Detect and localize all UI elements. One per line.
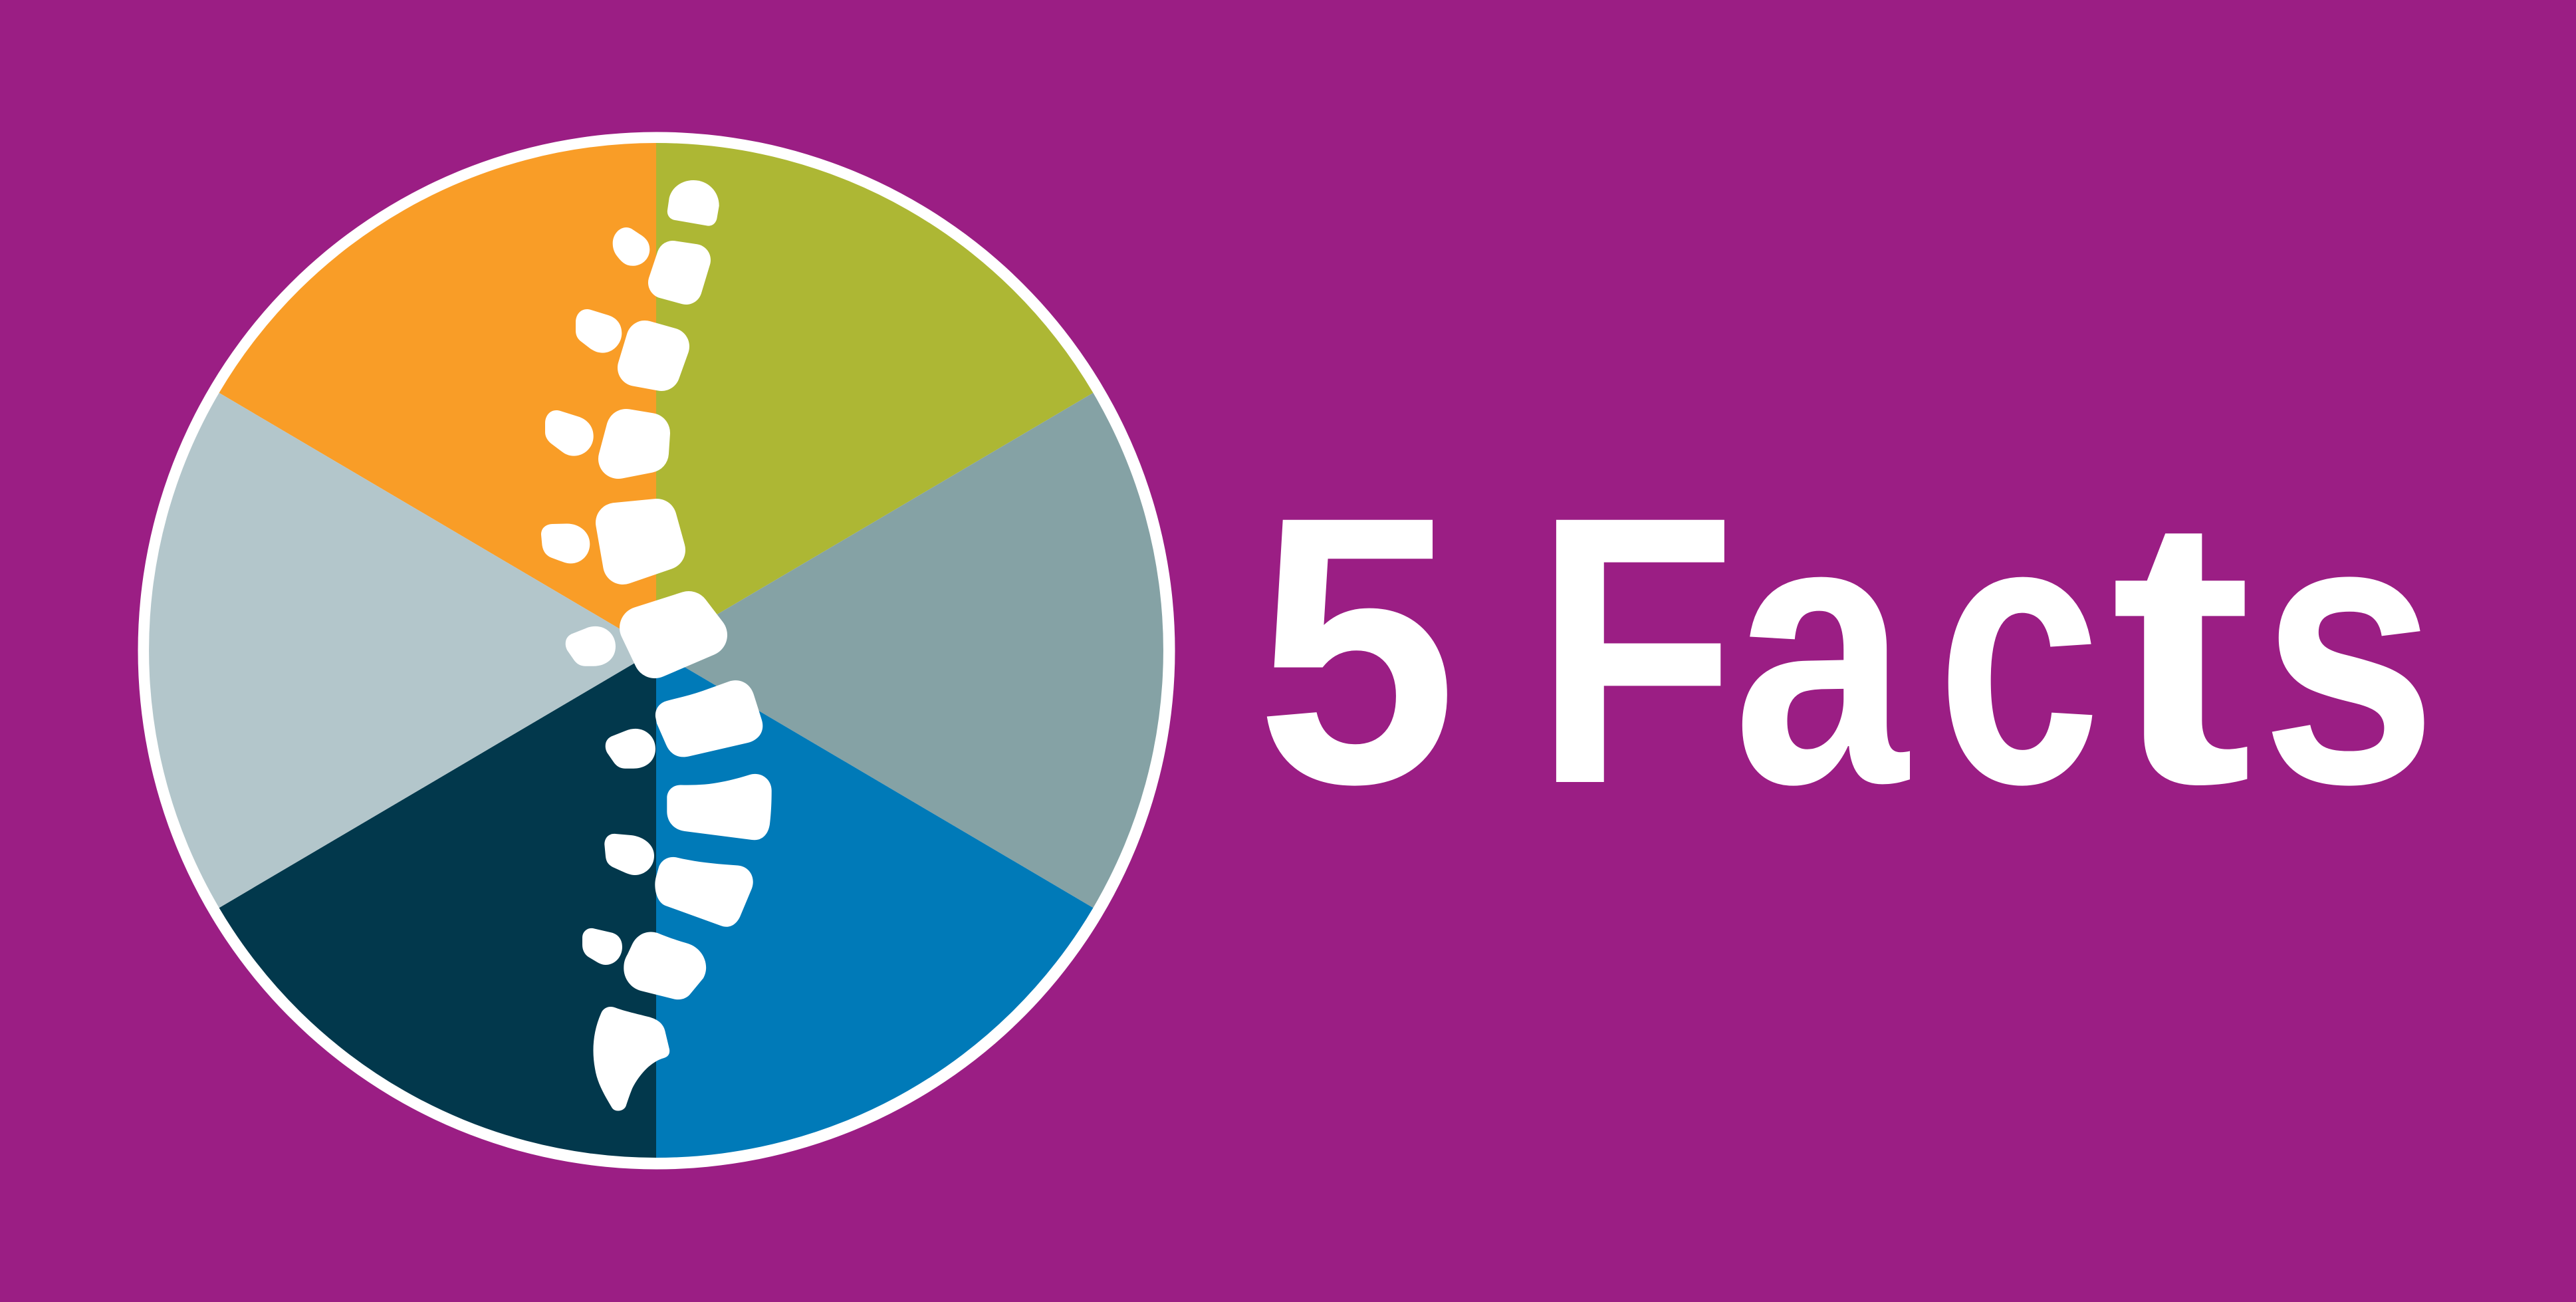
title: 5 Facts: a xyxy=(1733,438,1910,863)
vertebra 4 xyxy=(618,429,650,459)
sacrum xyxy=(593,1007,669,1111)
title: 5 Facts: F xyxy=(1534,438,1736,863)
segment: blue xyxy=(656,650,1093,1158)
process 6 xyxy=(566,626,616,666)
segment: light grey xyxy=(149,393,656,908)
process 3 xyxy=(576,309,622,353)
segment: navy xyxy=(219,650,656,1158)
segment: grey teal xyxy=(656,393,1163,908)
vertebra 6 xyxy=(641,612,706,657)
title: 5 Facts: s xyxy=(2261,438,2437,863)
spine wheel logo xyxy=(138,132,1175,1169)
segment: olive xyxy=(656,143,1093,650)
spine vertebrae xyxy=(541,180,772,1111)
white ring xyxy=(138,132,1175,1169)
process 9 xyxy=(582,928,622,965)
title: 5 Facts: t xyxy=(2110,438,2252,863)
process 2 xyxy=(613,227,649,266)
title: 5 Facts: 5 xyxy=(1256,438,1457,863)
process 5 xyxy=(541,523,590,563)
vertebra 8 xyxy=(667,774,772,840)
process 8 xyxy=(604,834,654,875)
vertebra 1 xyxy=(667,180,719,226)
vertebra 7 xyxy=(655,680,762,757)
process 4 xyxy=(545,410,594,456)
wheel segments xyxy=(149,143,1163,1158)
vertebra 10 xyxy=(624,932,706,999)
title: 5 Facts: c xyxy=(1936,438,2101,863)
process 7 xyxy=(606,729,655,769)
segment: orange xyxy=(219,143,656,650)
vertebra 9 xyxy=(655,857,753,927)
vertebra 2 xyxy=(664,257,695,289)
vertebra 5 xyxy=(616,519,665,565)
vertebra 3 xyxy=(636,339,671,372)
